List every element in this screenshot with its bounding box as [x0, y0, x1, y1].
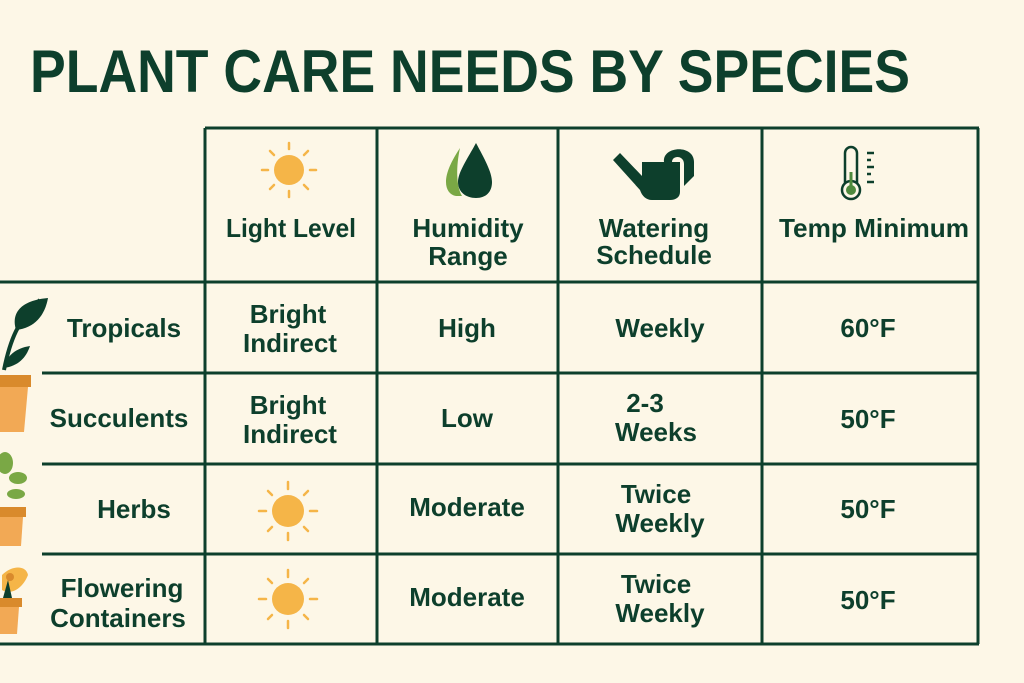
icon: sun flowering — [259, 570, 317, 628]
humidity cells: High — [438, 313, 496, 343]
watering cells: Twice — [621, 569, 691, 599]
icon: watering can — [613, 149, 694, 200]
temperature cells: 50°F — [840, 585, 896, 615]
light level cells: Indirect — [243, 419, 337, 449]
icon: sun herbs — [259, 482, 317, 540]
species labels: Succulents — [50, 403, 188, 433]
humidity cells — [409, 313, 525, 612]
humidity cells: Low — [441, 403, 494, 433]
icon: flowering container — [0, 568, 28, 634]
icon: water drops — [446, 143, 492, 198]
header labels: Humidity — [412, 213, 524, 243]
species labels: Containers — [50, 603, 186, 633]
temperature cells — [840, 313, 896, 615]
temperature cells: 50°F — [840, 494, 896, 524]
icon: tropical plant — [0, 298, 48, 432]
watering cells: Weekly — [615, 313, 705, 343]
header labels: Light Level — [226, 213, 356, 243]
watering cells: 2-3 — [626, 388, 664, 418]
light level cells: Indirect — [243, 328, 337, 358]
temperature cells: 60°F — [840, 313, 896, 343]
icon: thermometer — [842, 147, 874, 199]
species labels: Flowering — [61, 573, 183, 603]
temperature cells: 50°F — [840, 404, 896, 434]
title: PLANT CARE NEEDS BY SPECIES — [30, 38, 910, 105]
watering cells: Twice — [621, 479, 691, 509]
watering cells: Weeks — [615, 417, 697, 447]
header labels: Schedule — [596, 240, 712, 270]
icon: sun header — [262, 143, 316, 197]
humidity cells: Moderate — [409, 582, 525, 612]
header labels: Temp Minimum — [779, 213, 969, 243]
species labels — [50, 313, 188, 633]
header labels: Watering — [599, 213, 709, 243]
humidity cells: Moderate — [409, 492, 525, 522]
header labels — [226, 213, 969, 271]
header labels: Range — [428, 241, 508, 271]
watering cells: Weekly — [615, 598, 705, 628]
light level cells: Bright — [250, 390, 327, 420]
species labels: Herbs — [97, 494, 171, 524]
table grid — [0, 128, 979, 644]
species labels: Tropicals — [67, 313, 181, 343]
watering cells — [615, 313, 705, 628]
light level cells — [243, 299, 337, 449]
light level cells: Bright — [250, 299, 327, 329]
watering cells: Weekly — [615, 508, 705, 538]
icon: herb plant — [0, 452, 27, 546]
